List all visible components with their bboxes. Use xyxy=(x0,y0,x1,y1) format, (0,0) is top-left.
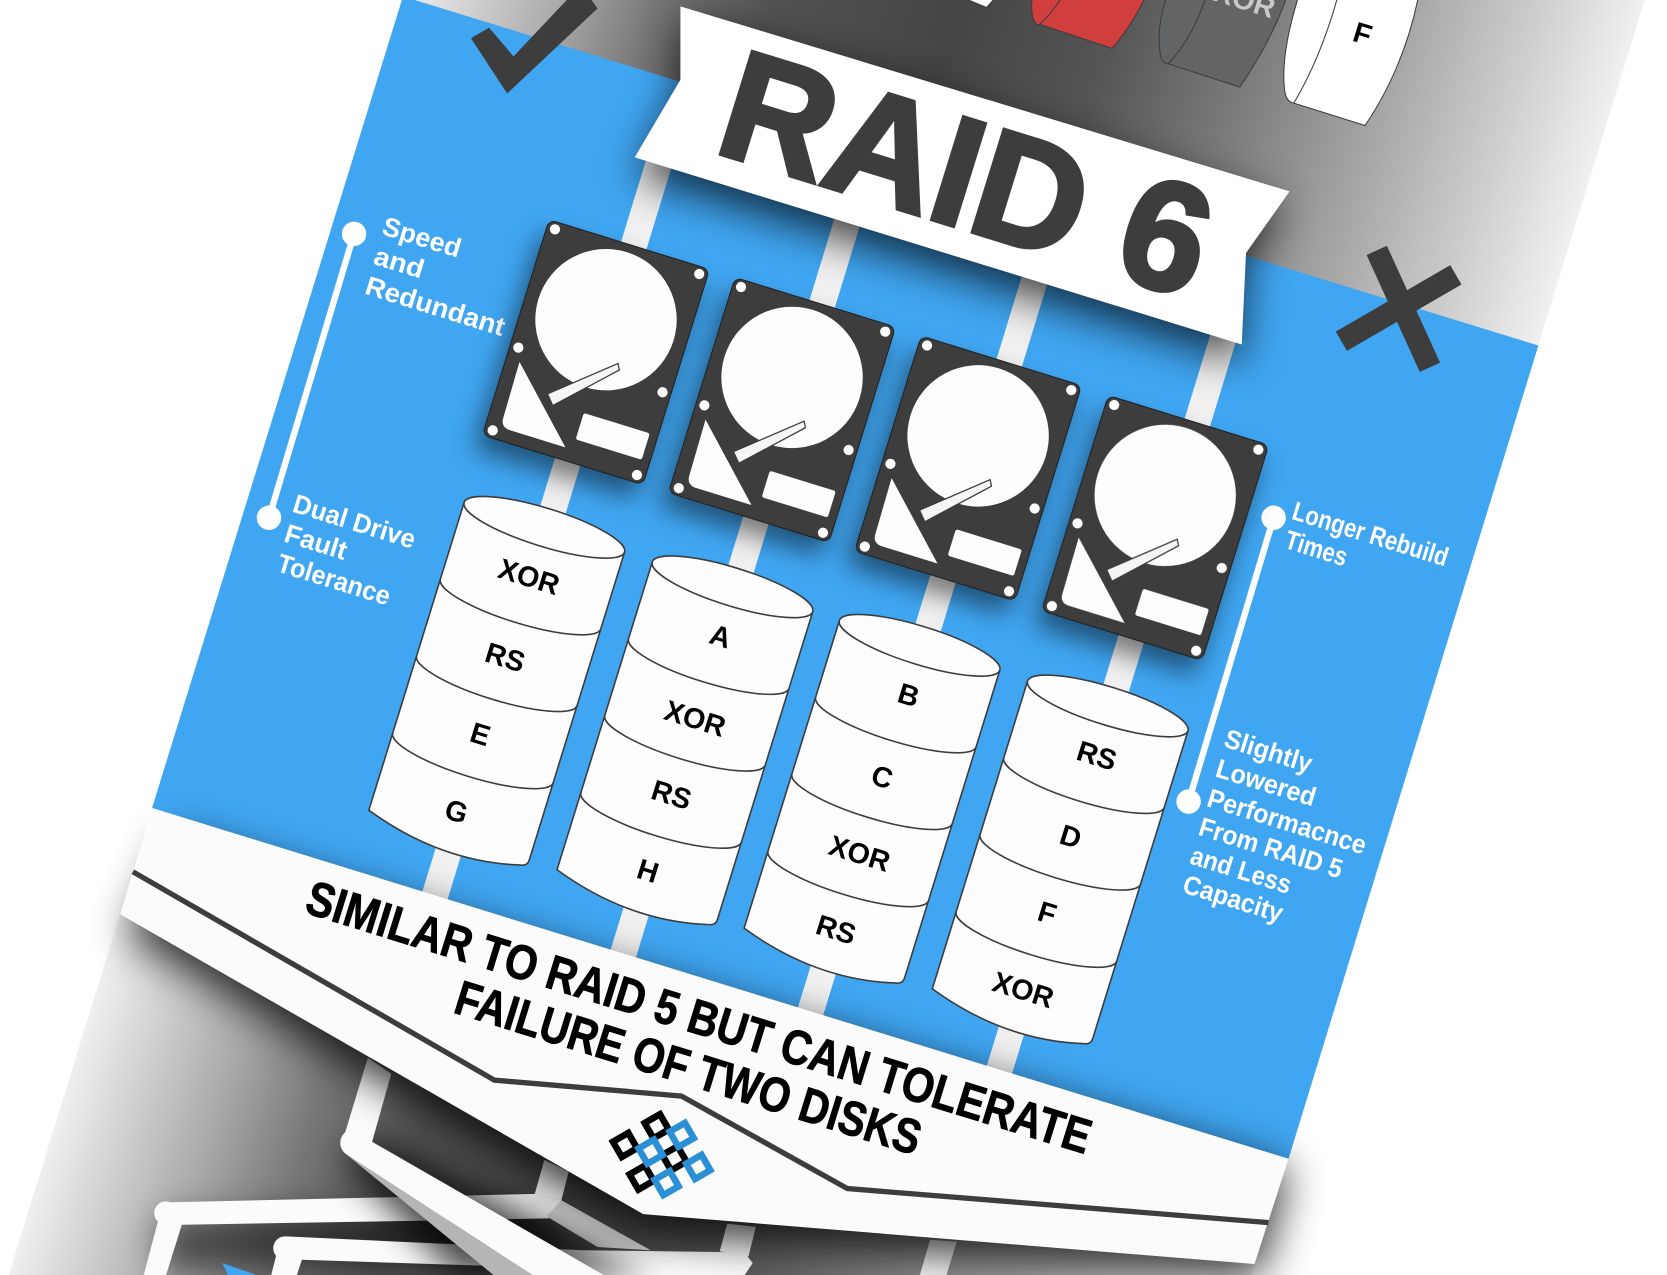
cons text: bottom: Capacity xyxy=(1179,869,1287,928)
disk stack 4: XOR xyxy=(989,966,1058,1015)
pros text: bottom: Tolerance xyxy=(274,548,394,611)
small blue triangle xyxy=(222,1263,258,1275)
pros text: bottom: Dual Drive xyxy=(290,488,419,555)
cylinder: white with F: F xyxy=(1349,17,1375,52)
logo: knot icon xyxy=(613,1114,710,1195)
right timeline xyxy=(1176,506,1286,814)
disk stack 4: F xyxy=(1034,896,1060,931)
lower connector pipes xyxy=(144,1160,957,1275)
cylinder: white with F xyxy=(1284,0,1418,125)
cons text: top: Times xyxy=(1281,525,1351,572)
disk stack 2: H xyxy=(633,853,662,890)
disk stack 3: RS xyxy=(812,909,860,952)
pros text: top: Redundant xyxy=(362,270,509,342)
cons text: bottom: and Less xyxy=(1187,840,1295,900)
disk stack 4 xyxy=(927,663,1194,1054)
cons text: bottom: Lowered xyxy=(1212,753,1320,812)
pros text: top: and xyxy=(370,241,428,284)
disk stack 3 xyxy=(739,602,1006,994)
cons text: top: Longer Rebuild xyxy=(1289,496,1452,572)
title: RAID 6 xyxy=(701,16,1232,331)
disk stack 3: XOR xyxy=(825,830,894,879)
pros text: top: Speed xyxy=(379,211,465,264)
pipe: short diagonal xyxy=(546,1200,651,1250)
pros text: bottom xyxy=(274,488,419,611)
hard drive 1 xyxy=(482,220,709,485)
bottom band xyxy=(120,808,1289,1264)
title banner xyxy=(635,6,1290,344)
cylinders cut off at top xyxy=(963,0,1418,125)
shadow of long diagonal pipe xyxy=(342,1138,649,1275)
cons text: bottom: Slightly xyxy=(1221,723,1316,779)
cons text: bottom xyxy=(1179,723,1370,928)
pipe: lower horizontal xyxy=(271,1236,753,1275)
disk stack 4: RS xyxy=(1073,735,1120,778)
left timeline xyxy=(257,222,366,530)
disk stack 2: XOR xyxy=(660,695,730,744)
disk stack 2 xyxy=(552,544,818,935)
pros text: top xyxy=(362,211,509,342)
pipe: short verticals xyxy=(535,1160,957,1275)
disk stack 3: C xyxy=(867,759,897,796)
cylinder: red xyxy=(1032,0,1145,48)
shadows of drives xyxy=(474,234,1261,675)
pipe: long diagonal with elbow xyxy=(340,1058,605,1275)
hard drive 4 xyxy=(1042,395,1269,660)
hard drive 2 xyxy=(668,277,896,542)
pipe: upper horizontal xyxy=(144,1194,561,1275)
shadow of title banner xyxy=(636,21,1281,361)
cons text: bottom: From RAID 5 xyxy=(1195,812,1347,884)
cons text: bottom: Performacnce xyxy=(1204,783,1370,860)
disk stack 1 xyxy=(364,484,630,876)
disk stack 2: A xyxy=(706,619,735,655)
cylinder: white fragment xyxy=(963,0,995,7)
cross icon xyxy=(1341,250,1456,367)
disk stack 3: B xyxy=(894,678,923,714)
check mark icon xyxy=(471,0,597,94)
disk stack 1: E xyxy=(466,717,494,753)
hard drive 3 xyxy=(854,336,1082,601)
disk stack 2: RS xyxy=(647,774,695,817)
disk stack 1: G xyxy=(441,794,472,831)
band text: FAILURE OF TWO DISKS xyxy=(449,971,928,1166)
disk stack 1: XOR xyxy=(494,553,563,602)
cylinder: gray with XOR xyxy=(1159,0,1286,87)
disk stack 4: D xyxy=(1056,819,1085,856)
blue panel xyxy=(152,0,1538,1159)
pros text: bottom: Fault xyxy=(281,518,351,566)
band text: SIMILAR TO RAID 5 BUT CAN TOLERATE xyxy=(300,871,1098,1165)
disk stack 1: RS xyxy=(481,637,529,679)
shadow of upper horizontal pipe xyxy=(159,1207,553,1270)
shadow of bottom band xyxy=(128,835,1289,1275)
vertical connector bars xyxy=(402,138,1243,1148)
